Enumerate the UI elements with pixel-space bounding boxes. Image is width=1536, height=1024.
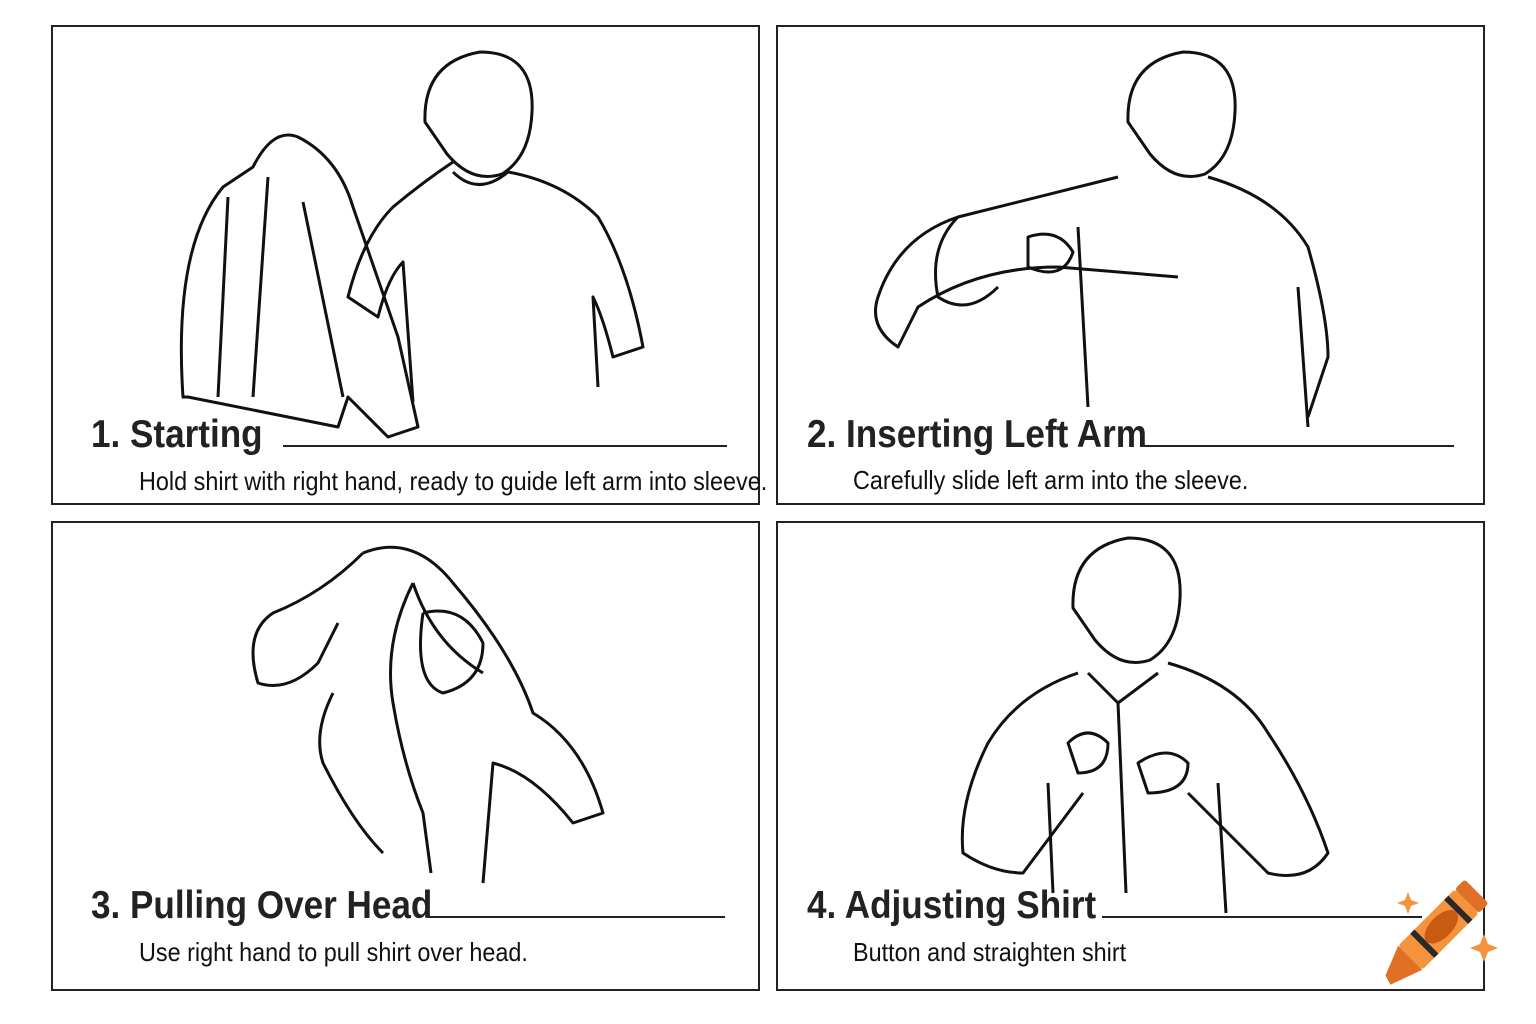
panel: step 2 inserting left arm [776,25,1485,505]
illustration: man buttoning shirt [960,536,1330,914]
description: Carefully slide left arm into the sleeve. [853,465,1248,495]
illustration: man holding shirt [180,50,644,438]
description: Button and straighten shirt [853,937,1126,967]
heading: 3. Pulling Over Head: 3. Pulling Over Head [91,884,432,927]
description: Use right hand to pull shirt over head. [139,937,528,967]
illustration: man pulling shirt over head [252,546,604,884]
panel: step 1 starting [51,25,760,505]
panel: step 4 adjusting shirt [776,521,1485,991]
icon: orange crayon with sparkles [1386,880,1498,985]
heading: 2. Inserting Left Arm: 2. Inserting Left Arm [807,413,1147,456]
heading: 4. Adjusting Shirt: 4. Adjusting Shirt [807,884,1096,927]
illustration: man inserting arm [874,50,1330,428]
panel: step 3 pulling over head [51,521,760,991]
description: Hold shirt with right hand, ready to guide left arm into sleeve. [139,466,767,496]
heading: 1. Starting: 1. Starting [91,413,263,456]
